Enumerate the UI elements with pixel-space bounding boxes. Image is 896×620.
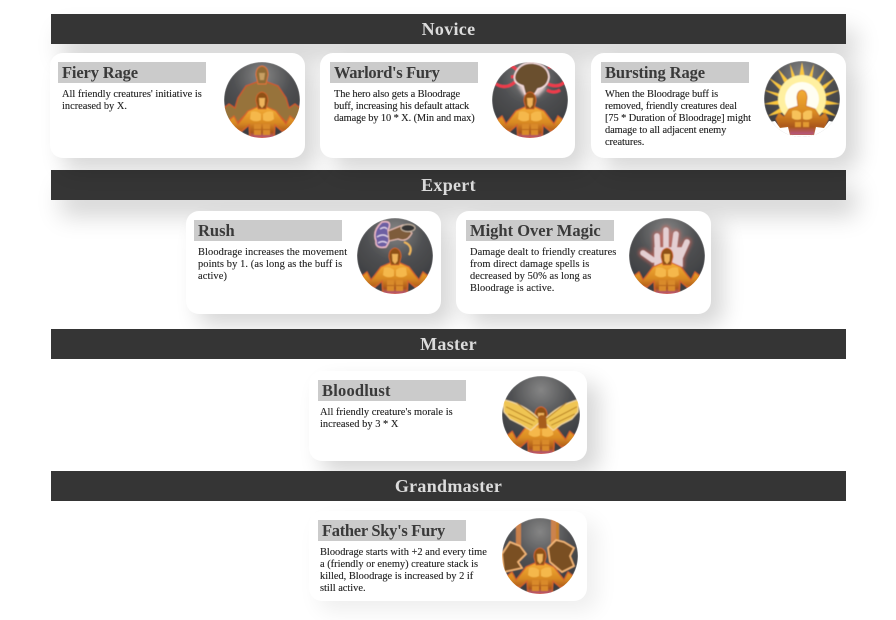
title: Rush xyxy=(194,220,342,241)
heading: Grandmaster xyxy=(51,471,846,501)
description: Bloodrage is active. xyxy=(470,283,554,294)
description: buff, increasing his default attack xyxy=(334,101,469,112)
description xyxy=(320,407,453,430)
description: All friendly creature's morale is xyxy=(320,407,453,418)
description: The hero also gets a Bloodrage xyxy=(334,89,460,100)
icon: open hand xyxy=(629,218,705,294)
description: [75 * Duration of Bloodrage] might xyxy=(605,113,751,124)
heading: Expert xyxy=(51,170,846,200)
title: Warlord's Fury: Warlord's Fury xyxy=(334,63,440,82)
title: Might Over Magic: Might Over Magic xyxy=(470,221,601,240)
description: Bloodrage starts with +2 and every time xyxy=(320,547,487,558)
description: creatures. xyxy=(605,137,644,148)
panel: Rush xyxy=(186,211,441,314)
heading: Novice: Novice xyxy=(422,19,475,39)
description xyxy=(198,247,348,282)
heading: Grandmaster: Grandmaster xyxy=(395,476,502,496)
panel: Warlord's Fury xyxy=(320,53,575,158)
title: Bloodlust xyxy=(318,380,466,401)
description: from direct damage spells is xyxy=(470,259,589,270)
description: All friendly creatures' initiative is xyxy=(62,89,202,100)
title: Father Sky's Fury: Father Sky's Fury xyxy=(322,521,445,540)
description xyxy=(334,89,475,124)
heading: Master xyxy=(51,329,846,359)
title: Fiery Rage xyxy=(58,62,206,83)
description xyxy=(320,547,487,594)
icon: raised fist xyxy=(492,62,568,138)
panel: Bursting Rage xyxy=(591,53,846,158)
description xyxy=(470,247,616,294)
description: decreased by 50% as long as xyxy=(470,271,591,282)
description: points by 1. (as long as the buff is xyxy=(198,259,342,270)
title: Fiery Rage: Fiery Rage xyxy=(62,63,138,82)
heading: Novice xyxy=(51,14,846,44)
title: Bursting Rage xyxy=(601,62,749,83)
icon: weapons of the sky xyxy=(502,518,578,594)
description: still active. xyxy=(320,583,366,594)
icon: boot xyxy=(357,218,433,294)
panel: Bloodlust xyxy=(309,371,587,461)
description: killed, Bloodrage is increased by 2 if xyxy=(320,571,473,582)
title: Bursting Rage: Bursting Rage xyxy=(605,63,705,82)
icon: golden wings xyxy=(502,376,580,454)
description: increased by 3 * X xyxy=(320,419,398,430)
description: Bloodrage increases the movement xyxy=(198,247,347,258)
description: damage to all adjacent enemy xyxy=(605,125,726,136)
description: removed, friendly creatures deal xyxy=(605,101,737,112)
title: Rush: Rush xyxy=(198,221,235,240)
panel: Fiery Rage xyxy=(50,53,305,158)
title: Bloodlust: Bloodlust xyxy=(322,381,391,400)
description xyxy=(62,89,202,112)
panel: Father Sky's Fury xyxy=(309,511,587,601)
description: Damage dealt to friendly creatures xyxy=(470,247,616,258)
description: increased by X. xyxy=(62,101,127,112)
title: Warlord's Fury xyxy=(330,62,478,83)
icon: double figure xyxy=(224,62,300,138)
panel: Might Over Magic xyxy=(456,211,711,314)
heading: Expert: Expert xyxy=(421,175,476,195)
description: damage by 10 * X. (Min and max) xyxy=(334,113,475,124)
heading: Master: Master xyxy=(420,334,477,354)
description: a (friendly or enemy) creature stack is xyxy=(320,559,478,570)
icon: sunburst xyxy=(764,61,840,137)
description: active) xyxy=(198,271,227,282)
description: When the Bloodrage buff is xyxy=(605,89,718,100)
description xyxy=(604,89,751,148)
